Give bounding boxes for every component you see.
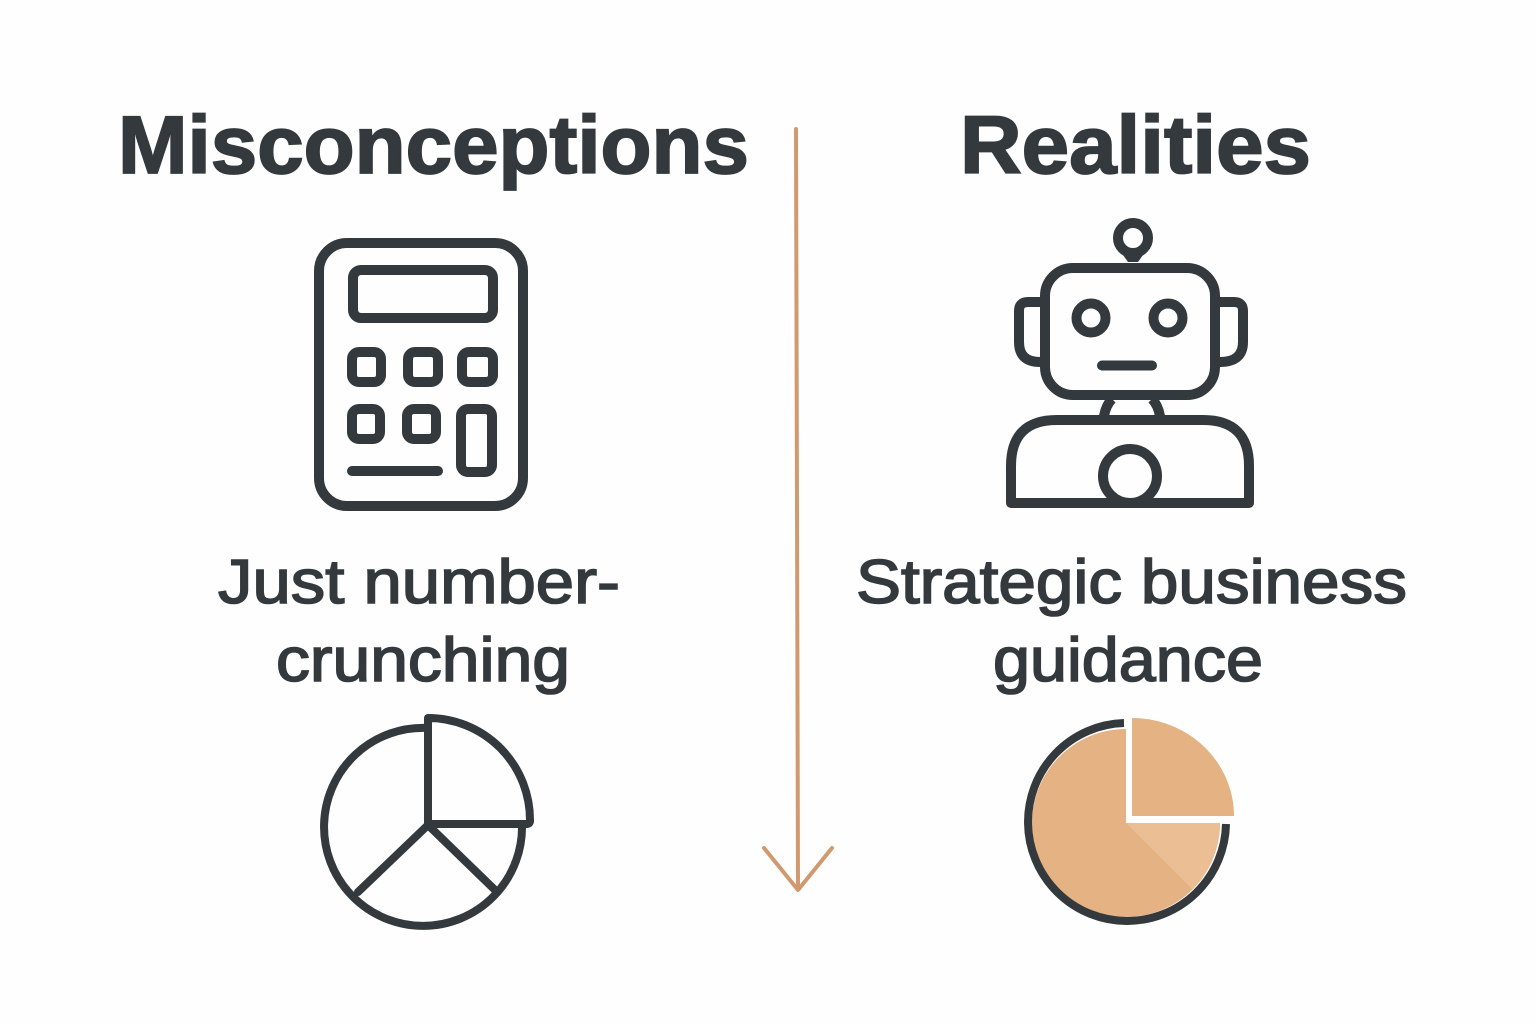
text: Just number-crunching: Just number- <box>218 548 620 617</box>
icon: calculator <box>319 243 523 506</box>
text: Strategic business guidance: Strategic business <box>856 548 1407 617</box>
text: Strategic business guidance: guidance <box>993 626 1263 695</box>
icon: robot <box>1011 223 1249 503</box>
text: Strategic business guidance <box>856 548 1407 695</box>
text: Just number-crunching: crunching <box>276 626 570 695</box>
heading: Realities: Realities <box>960 100 1311 191</box>
chart: outlined pie <box>324 718 530 926</box>
heading: Misconceptions: Misconceptions <box>118 100 749 191</box>
arrow: vertical divider pointing down <box>764 129 832 890</box>
chart: filled pie <box>1028 715 1240 921</box>
text: Just number-crunching <box>218 548 620 695</box>
